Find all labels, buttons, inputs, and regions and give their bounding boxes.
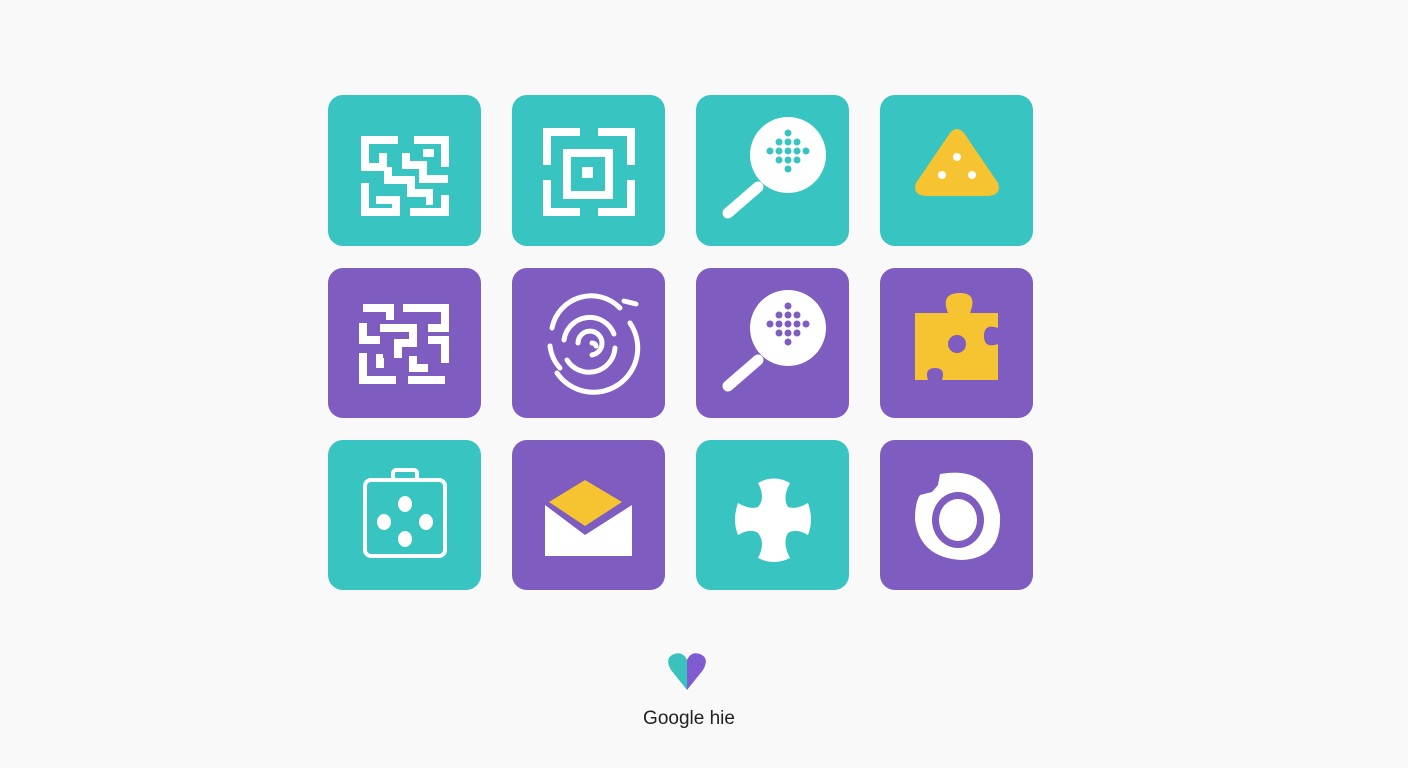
tile: cheese teal <box>880 95 1033 246</box>
tile: racket teal <box>696 95 849 246</box>
tile: briefcase teal <box>328 440 481 590</box>
tile: cross teal <box>696 440 849 590</box>
logo text: Google hie <box>643 708 735 729</box>
tile: fingerprint purple <box>512 268 665 418</box>
tile: racket purple <box>696 268 849 418</box>
tile: maze purple <box>328 268 481 418</box>
logo: heart <box>668 653 706 690</box>
tile: envelope purple <box>512 440 665 590</box>
tile: puzzle purple <box>880 268 1033 418</box>
tile: ring purple <box>880 440 1033 590</box>
icon grid <box>328 95 1033 590</box>
tile: scan frame teal <box>512 95 665 246</box>
tile: maze teal <box>328 95 481 246</box>
